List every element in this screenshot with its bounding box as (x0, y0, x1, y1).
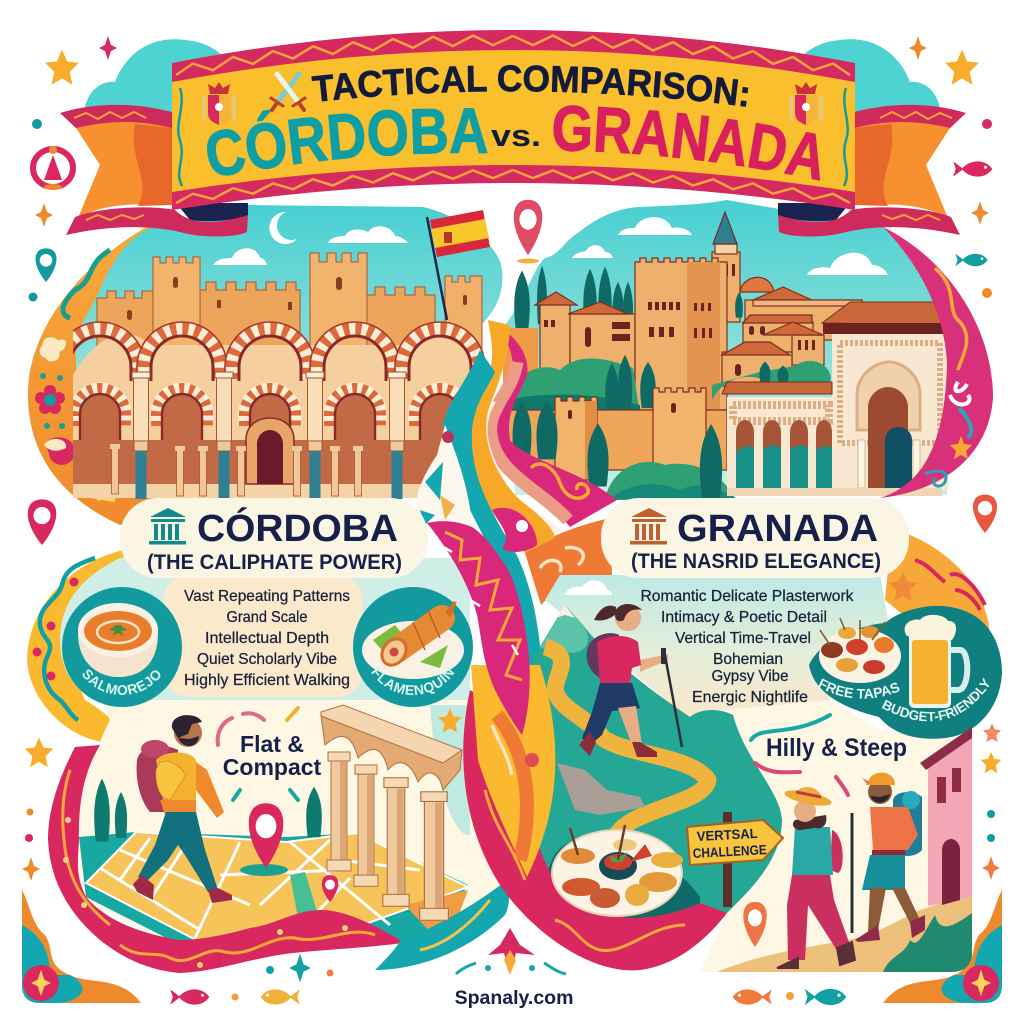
panel: Cordoba lower cream (75, 700, 500, 950)
heading: Granada pill (601, 498, 909, 578)
figure: man hiker (852, 773, 925, 942)
clouds (572, 217, 888, 275)
badge: flamenquin (353, 587, 473, 707)
tapas platter (552, 825, 683, 916)
footer: website: Spanaly.com (455, 987, 573, 1009)
trees (94, 778, 322, 842)
title: vs: vs. (491, 118, 541, 153)
lower fortress wall and towers (505, 388, 727, 480)
ground (717, 893, 972, 972)
icon: crest right (789, 82, 823, 125)
scene: Granada (503, 200, 948, 500)
heading: Cordoba pill: (THE CALIPHATE POWER) (147, 551, 402, 574)
palace buildings left (503, 292, 635, 383)
cloud (213, 248, 267, 265)
roofed lower building (722, 342, 792, 386)
badge: salmorejo (62, 587, 182, 707)
badge: tapas and beer: BUDGET-FRIENDLY (882, 678, 990, 722)
mid buildings (743, 287, 862, 365)
badge: flamenquin: FLAMENQUÍN (371, 666, 454, 696)
text block: Granada traits: Romantic Delicate Plasterwork (640, 588, 854, 605)
text block: Cordoba traits: Intellectual Depth (205, 630, 329, 647)
decorative icons around the border (22, 36, 1001, 881)
text block: Cordoba traits: Grand Scale (226, 609, 308, 626)
title line (314, 91, 750, 107)
castle walls (97, 253, 482, 350)
label: hilly and steep: Hilly & Steep (766, 734, 907, 762)
bottom fish row (170, 989, 846, 1005)
scene: Cordoba (55, 205, 502, 499)
left outer swoosh with flowers (28, 225, 300, 525)
text block: Cordoba traits: Quiet Scholarly Vibe (197, 651, 337, 668)
mint patch (430, 705, 470, 835)
corner ornament left (22, 890, 141, 1003)
icon: map pin left (240, 803, 288, 876)
sky (76, 205, 502, 495)
teal ground under map (79, 832, 468, 945)
yellow swoosh (27, 548, 135, 743)
figure: woman with hat (777, 787, 855, 968)
heading: Granada pill: (THE NASRID ELEGANCE) (631, 550, 881, 573)
bottom centre ornaments (266, 928, 566, 982)
trail (545, 647, 708, 840)
icon: map pin top (514, 200, 542, 264)
ribbon: yellow lens and crimson sweep (463, 665, 727, 970)
icon: crossed swords (271, 74, 305, 110)
plasterwork hall (822, 302, 948, 490)
banner: CÓRDOBA (207, 108, 488, 176)
teal ribbon end (375, 880, 509, 970)
icon: small map pin (322, 875, 338, 902)
signpost: CHALLENGE (692, 842, 767, 861)
accent strokes (218, 708, 848, 800)
front bushes and cypress trees (513, 401, 735, 500)
colonnade (722, 382, 942, 496)
pink house (920, 727, 972, 906)
label: flat and compact: Flat & (240, 731, 304, 757)
figure: woman hiker (579, 604, 682, 757)
frame ribbon: Cordoba lower (48, 745, 402, 973)
signpost: VERTSAL (696, 826, 758, 844)
ribbon tails (60, 105, 966, 236)
text block: Granada traits: Vertical Time-Travel (675, 630, 811, 647)
title: Granada (551, 150, 823, 181)
banner: GRANADA (553, 105, 820, 181)
right crimson band with scrolls (880, 227, 993, 498)
mosque arcades (55, 322, 485, 499)
tree (735, 292, 743, 318)
badge: tapas and beer (809, 606, 1002, 739)
icon: crest left (202, 82, 236, 125)
text block: Cordoba traits: Highly Efficient Walking (184, 672, 350, 689)
sky clouds behind banner (83, 39, 941, 130)
text block: Granada traits (640, 588, 854, 706)
panel: Cordoba middle (27, 548, 470, 743)
dome and bell tower (712, 212, 774, 322)
foliage (883, 913, 972, 972)
sky (505, 200, 947, 495)
signpost (687, 812, 783, 907)
ribbon: crimson zigzag (427, 521, 530, 735)
text block: Granada traits: Intimacy & Poetic Detail (661, 609, 827, 626)
icon: temple (630, 508, 667, 544)
text block: Granada traits: Energic Nightlife (692, 689, 808, 706)
orange ribbon (470, 320, 555, 553)
heading: Granada pill: GRANADA (677, 508, 878, 550)
teal ribbon (443, 350, 542, 685)
central woven ribbons (416, 320, 617, 685)
title: Cordoba (210, 153, 492, 178)
green bushes (503, 355, 831, 420)
rocks (557, 763, 645, 815)
heading: Cordoba pill (120, 498, 428, 578)
icon: temple (149, 508, 186, 544)
map tiles (86, 832, 468, 940)
tapas plate (819, 618, 901, 683)
panel: Granada sky and cream (545, 575, 972, 972)
cloud (328, 226, 408, 243)
text block: Cordoba traits: Vast Repeating Patterns (184, 588, 350, 605)
flag: Spain (427, 210, 490, 320)
main keep (635, 258, 727, 412)
badge: tapas and beer: FREE TAPAS (818, 678, 900, 699)
text block: Granada traits: Gypsy Vibe (712, 668, 789, 685)
Roman arcade (321, 705, 462, 920)
label: flat and compact (223, 731, 322, 780)
text block: Granada traits: Bohemian (713, 651, 783, 668)
text block: Cordoba traits (184, 588, 350, 689)
badge: salmorejo: SALMOREJO (82, 670, 160, 695)
corner ornament right (883, 890, 1002, 1003)
crimson swirl ribbon (488, 330, 617, 527)
banner (172, 30, 855, 210)
label: flat and compact: Compact (223, 754, 322, 780)
banner: TACTICAL COMPARISON: (311, 64, 748, 107)
panel: Granada mountain (530, 605, 782, 930)
back cypress trees (514, 266, 633, 330)
panel: Granada orange swooshes (525, 518, 990, 662)
moon (269, 212, 297, 244)
figure: male backpacker (133, 715, 232, 903)
icon: orange map pin (743, 902, 767, 947)
crimson scroll medallion (492, 508, 537, 552)
splash motif (416, 425, 472, 527)
heading: Cordoba pill: CÓRDOBA (197, 506, 398, 550)
beer mug (905, 615, 967, 708)
